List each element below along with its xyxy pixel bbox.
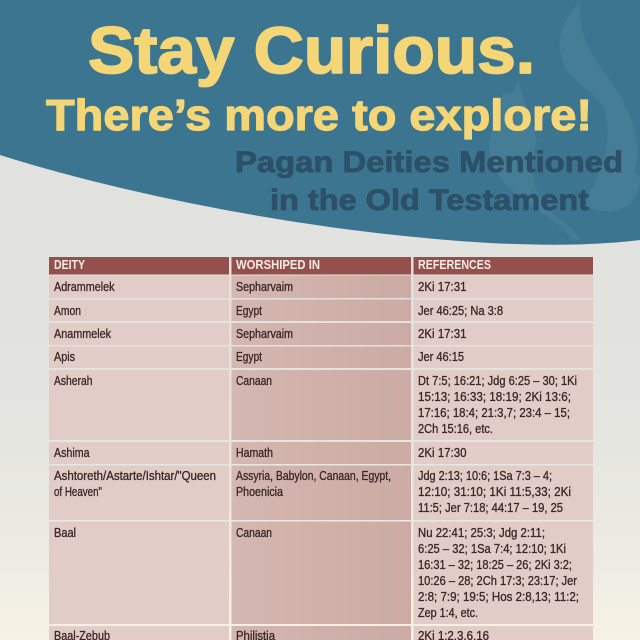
row: Ashima: 2Ki 17:30	[418, 446, 467, 460]
row: Ashtoreth: of Heaven"	[54, 485, 102, 499]
row: Baal: Nu 22:41; 25:3; Jdg 2:11;	[418, 526, 545, 540]
row: Amon: Egypt	[236, 304, 262, 318]
row: Amon	[49, 300, 593, 321]
row: Asherah	[49, 370, 593, 440]
row: Adrammelek: Sepharvaim	[236, 280, 293, 294]
row: Apis: Egypt	[236, 350, 262, 364]
row: Adrammelek: Adrammelek	[54, 280, 115, 294]
row: Baal: 10:26 – 28; 2Ch 17:3; 23:17; Jer	[418, 574, 577, 588]
row: Ashtoreth: Phoenicia	[236, 485, 283, 499]
row: Adrammelek: 2Ki 17:31	[418, 280, 467, 294]
table header row: WORSHIPED IN	[236, 257, 320, 272]
row: Asherah: Dt 7:5; 16:21; Jdg 6:25 – 30; 1Ki	[418, 374, 577, 388]
row: Amon: Amon	[54, 304, 81, 318]
row: Ashima: Ashima	[54, 446, 90, 460]
row: Anammelek: 2Ki 17:31	[418, 327, 467, 341]
row: Baal: Zep 1:4, etc.	[418, 606, 478, 620]
table header row	[49, 257, 593, 274]
row: Adrammelek	[49, 276, 593, 298]
row: Ashtoreth	[49, 466, 593, 520]
row: Ashtoreth: 11:5; Jer 7:18; 44:17 – 19, 25	[418, 501, 563, 515]
row: Baal: 6:25 – 32; 1Sa 7:4; 12:10; 1Ki	[418, 542, 566, 556]
table header row: DEITY	[54, 257, 85, 272]
header banner	[0, 0, 640, 245]
row: Ashima: Hamath	[236, 446, 273, 460]
heading: Pagan Deities Mentioned in the Old Testament: Pagan Deities Mentioned	[235, 146, 623, 179]
row: Anammelek	[49, 323, 593, 345]
row: Baal-Zebub	[49, 626, 593, 640]
subtitle: There's more to explore: There’s more to explore!	[46, 91, 592, 140]
row: Asherah: Canaan	[236, 374, 272, 388]
row: Apis: Apis	[54, 350, 75, 364]
row: Baal: 2:8; 7:9; 19:5; Hos 2:8,13; 11:2;	[418, 590, 579, 604]
table: pagan deities	[49, 257, 593, 640]
row: Ashtoreth: Assyria, Babylon, Canaan, Egypt,	[236, 469, 391, 483]
row: Asherah: Asherah	[54, 374, 93, 388]
heading: Pagan Deities Mentioned in the Old Testament	[235, 146, 623, 217]
row: Asherah: 15:13; 16:33; 18:19; 2Ki 13:6;	[418, 390, 571, 404]
row: Amon: Jer 46:25; Na 3:8	[418, 304, 503, 318]
heading: Pagan Deities Mentioned in the Old Testament: in the Old Testament	[270, 184, 589, 217]
row: Apis	[49, 346, 593, 368]
row: Ashtoreth: Ashtoreth/Astarte/Ishtar/"Queen	[54, 469, 216, 483]
icon: flame watermark	[489, 0, 640, 240]
row: Baal: Baal	[54, 526, 76, 540]
row: Baal: Canaan	[236, 526, 272, 540]
row: Apis: Jer 46:15	[418, 350, 464, 364]
row: Ashtoreth: Jdg 2:13; 10:6; 1Sa 7:3 – 4;	[418, 469, 552, 483]
row: Ashtoreth: 12:10; 31:10; 1Ki 11:5,33; 2Ki	[418, 485, 571, 499]
row: Anammelek: Anammelek	[54, 327, 112, 341]
title: Stay Curious: Stay Curious.	[88, 13, 535, 87]
row: Ashima	[49, 442, 593, 464]
row: Baal: 16:31 – 32; 18:25 – 26; 2Ki 3:2;	[418, 558, 572, 572]
table header row: REFERENCES	[418, 257, 491, 272]
row: Asherah: 17:16; 18:4; 21:3,7; 23:4 – 15;	[418, 406, 570, 420]
row: Baal	[49, 522, 593, 624]
row: Asherah: 2Ch 15:16, etc.	[418, 422, 493, 436]
row: Anammelek: Sepharvaim	[236, 327, 293, 341]
